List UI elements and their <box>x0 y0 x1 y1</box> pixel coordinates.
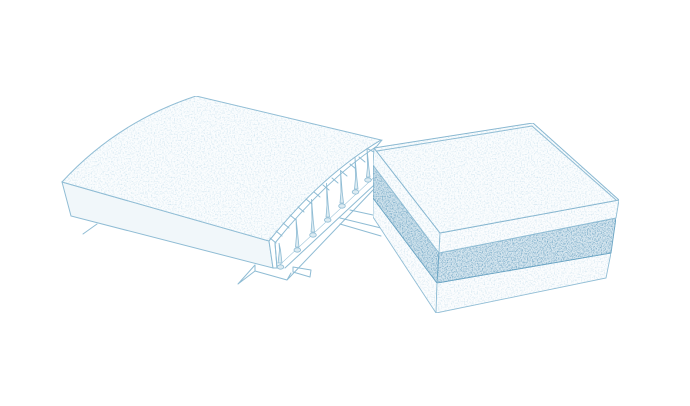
slab end rib with blocks <box>269 140 382 268</box>
left slab front face <box>62 182 273 268</box>
support beams under the slab <box>83 178 381 284</box>
dark middle layer left face <box>373 165 439 283</box>
top rim lip <box>377 126 616 200</box>
rod 2 <box>294 218 301 252</box>
upper layer front face <box>439 200 619 253</box>
rod 4 <box>324 183 331 222</box>
rod 6 <box>352 157 359 194</box>
top surface <box>374 123 619 233</box>
rod 7 <box>365 148 371 182</box>
lower layer front face <box>436 253 611 313</box>
anchor rods <box>277 148 371 269</box>
left slab curved top surface <box>62 96 381 241</box>
rod 3 <box>310 199 316 237</box>
dark middle layer front face <box>437 218 616 283</box>
rod 5 <box>339 170 345 208</box>
lower layer left face <box>373 198 437 313</box>
upper layer left face <box>373 148 440 253</box>
rod 1 <box>277 243 284 269</box>
right block <box>373 123 619 313</box>
